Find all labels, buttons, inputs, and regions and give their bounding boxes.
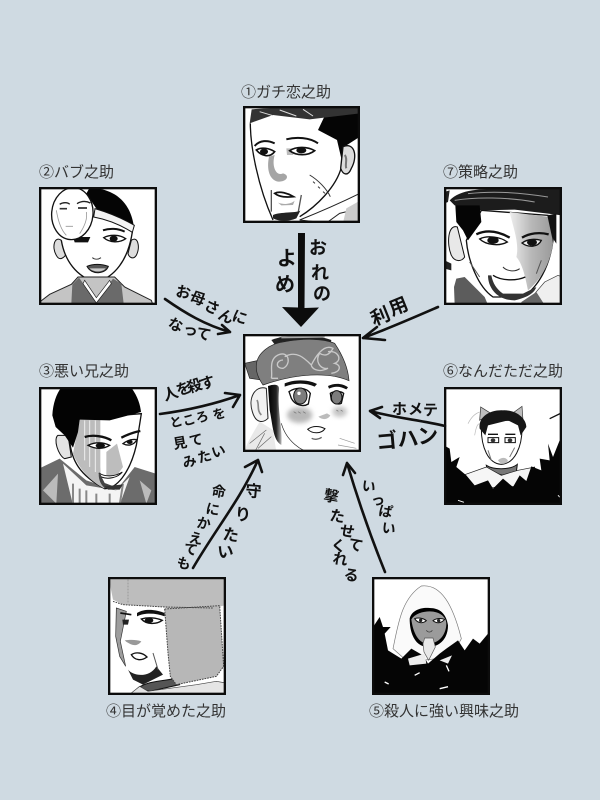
panel: character 5 portrait: [372, 577, 490, 695]
label: character 4: ④目が覚めた之助: [106, 703, 226, 720]
handwriting: お母さんに: お母さんに: [174, 283, 249, 328]
panel: character 3 portrait: [39, 387, 157, 505]
panel: central character portrait: [243, 334, 361, 452]
panel: character 7 portrait: [444, 187, 562, 305]
label: character 3: ③悪い兄之助: [39, 363, 129, 380]
arrow: 6 to centre: [370, 407, 445, 426]
handwriting: ゴハン: ゴハン: [375, 424, 439, 454]
arrow: 2 to centre: [165, 299, 230, 334]
heavy arrow: 1 to centre: [282, 233, 319, 327]
panel: character 1 portrait: [243, 106, 360, 223]
handwriting: おれの: おれの: [309, 238, 331, 304]
panel: character 6 portrait: [444, 387, 562, 505]
label: character 7: ⑦策略之助: [443, 164, 518, 181]
handwriting: 利用: 利用: [368, 294, 412, 331]
arrow: 7 to centre: [363, 307, 438, 340]
panel: character 2 portrait: [39, 187, 157, 305]
panel: character 4 portrait: [108, 577, 226, 695]
label: character 5: ⑤殺人に強い興味之助: [369, 703, 519, 720]
label: character 1: ①ガチ恋之助: [241, 84, 331, 101]
handwriting: みたい: みたい: [181, 442, 227, 471]
handwriting: なって: なって: [166, 315, 213, 345]
handwriting: 守りたい: 守りたい: [217, 482, 262, 562]
arrow: 3 to centre: [160, 393, 240, 414]
arrow: 5 to centre: [343, 463, 385, 572]
handwriting: 命にかえても: 命にかえても: [175, 482, 227, 572]
handwriting: 撃たせてくれる: 撃たせてくれる: [322, 487, 365, 586]
handwriting: いっぱい: いっぱい: [360, 477, 397, 537]
handwriting: 人を殺す: 人を殺す: [161, 373, 218, 405]
handwriting: 見て: 見て: [172, 431, 204, 452]
label: character 2: ②バブ之助: [39, 163, 114, 181]
handwriting: ところを: ところを: [168, 405, 227, 431]
label: character 6: ⑥なんだただ之助: [443, 363, 563, 380]
handwriting: ホメテ: ホメテ: [392, 401, 438, 419]
handwriting: よめ: よめ: [275, 248, 297, 296]
arrow: 4 to centre: [193, 460, 262, 568]
